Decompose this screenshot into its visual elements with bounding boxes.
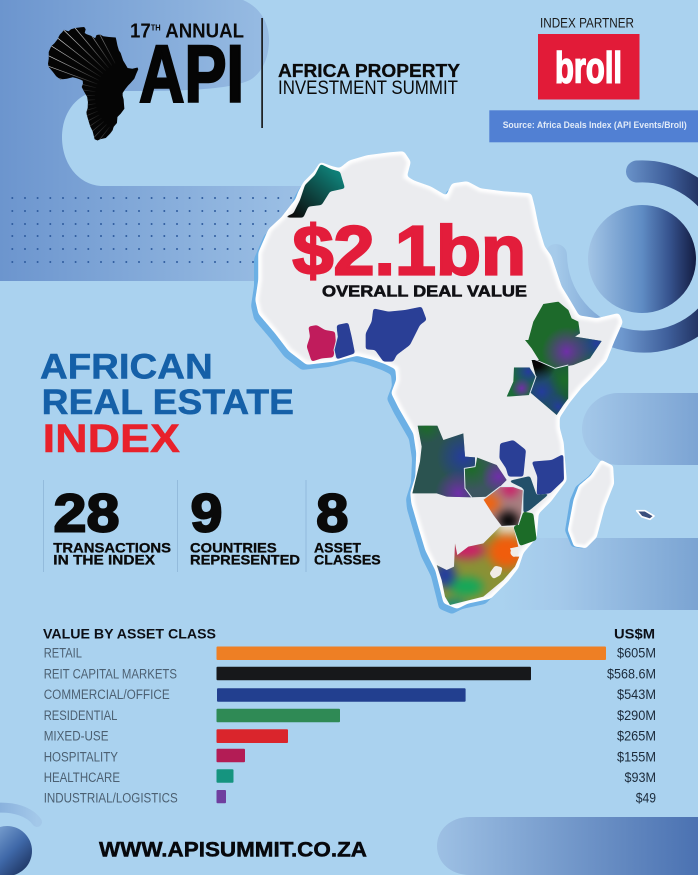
chart unit heading: US$M xyxy=(614,626,655,642)
country: Morocco xyxy=(283,164,345,218)
country: Ivory Coast xyxy=(307,325,336,362)
source bar xyxy=(489,110,700,142)
stat dividers xyxy=(43,480,306,572)
country: Tanzania highlighted region xyxy=(499,440,526,477)
row: mixed-use: MIXED-USE xyxy=(44,728,109,744)
country: Ethiopia xyxy=(525,302,602,368)
logo: API wordmark: API xyxy=(139,30,244,120)
row: healthcare: $93M xyxy=(624,770,656,785)
row: industrial/logistics: $49 xyxy=(636,790,656,806)
row: residential xyxy=(44,708,656,723)
row: commercial/office xyxy=(44,687,656,702)
source bar: Source: Africa Deals Index (API Events/Broll) xyxy=(503,120,687,131)
logo: summit name: INVESTMENT SUMMIT xyxy=(278,78,458,99)
row: mixed-use: $265M xyxy=(617,728,656,744)
logo: summit name xyxy=(278,60,461,99)
row: mixed-use xyxy=(44,728,656,744)
country: Uganda xyxy=(506,367,536,397)
chart heading: VALUE BY ASSET CLASS xyxy=(43,626,216,642)
stat: asset classes: CLASSES xyxy=(314,552,381,567)
stat: transactions xyxy=(53,484,171,567)
decorative gradient circle xyxy=(588,205,696,313)
stat: asset classes: 8 xyxy=(316,484,348,544)
decorative pill: middle right xyxy=(582,393,700,465)
country: Ghana xyxy=(334,323,355,359)
dot pattern xyxy=(11,197,292,263)
website address: WWW.APISUMMIT.CO.ZA xyxy=(99,838,367,862)
stat: transactions: IN THE INDEX xyxy=(53,552,156,567)
decorative ring arc xyxy=(556,171,700,342)
country: Mozambique north xyxy=(532,454,564,495)
row: healthcare xyxy=(44,769,656,785)
country: Zimbabwe xyxy=(484,487,523,526)
row: hospitality xyxy=(44,749,656,764)
logo: 17th annual: ANNUAL xyxy=(161,20,244,42)
row: retail xyxy=(44,646,656,660)
countries: West and East and Southern Africa xyxy=(307,300,654,613)
country border lines xyxy=(334,327,568,525)
decorative pill: lower right xyxy=(500,538,700,610)
Broll logo xyxy=(538,34,640,100)
title: AFRICAN xyxy=(40,347,213,386)
title: REAL ESTATE xyxy=(42,383,294,422)
decorative pill: bottom right xyxy=(437,817,700,875)
map shadow xyxy=(252,159,616,613)
country: South Africa xyxy=(436,526,520,605)
stat: countries: 9 xyxy=(190,484,222,544)
logo: API Africa mark xyxy=(48,27,138,140)
header background panel xyxy=(0,0,320,281)
index partner label: INDEX PARTNER xyxy=(540,14,634,30)
country: Mozambique south xyxy=(513,512,537,546)
logo rays xyxy=(48,28,115,140)
row: retail: RETAIL xyxy=(44,646,82,660)
headline figure: $2.1bn xyxy=(292,212,526,290)
row: REIT capital markets xyxy=(44,666,656,682)
row: hospitality: $155M xyxy=(617,750,656,764)
row: retail: $605M xyxy=(617,646,656,660)
row: healthcare: HEALTHCARE xyxy=(44,770,120,785)
row: industrial/logistics xyxy=(44,790,656,806)
row: residential: $290M xyxy=(617,708,656,723)
stat: countries xyxy=(190,484,300,567)
country: Angola xyxy=(412,426,475,498)
row: commercial/office: $543M xyxy=(617,687,656,702)
headline caption: OVERALL DEAL VALUE xyxy=(322,284,527,301)
stat: countries: COUNTRIES xyxy=(190,540,277,555)
row: REIT capital markets: REIT CAPITAL MARKETS xyxy=(44,666,177,682)
logo divider xyxy=(261,18,263,128)
row: REIT capital markets: $568.6M xyxy=(607,666,656,682)
Eswatini xyxy=(510,547,519,557)
decorative arc: bottom left xyxy=(0,808,37,822)
country: Malawi region xyxy=(508,476,550,513)
row: industrial/logistics: INDUSTRIAL/LOGISTICS xyxy=(44,790,178,806)
title: INDEX xyxy=(43,417,180,461)
country: Zambia xyxy=(464,458,506,498)
right edge strip xyxy=(698,0,700,875)
logo: 17th annual: TH xyxy=(151,23,161,32)
stat: asset classes: ASSET xyxy=(314,540,362,555)
title xyxy=(40,347,294,461)
Lesotho xyxy=(489,566,503,579)
island: Mauritius xyxy=(637,511,654,519)
map landmass xyxy=(257,153,621,607)
Madagascar xyxy=(565,462,613,549)
row: hospitality: HOSPITALITY xyxy=(44,750,118,764)
country: Kenya xyxy=(530,360,568,415)
stat: transactions: TRANSACTIONS xyxy=(53,540,171,555)
Broll logo: broll xyxy=(555,44,622,92)
stat: countries: REPRESENTED xyxy=(190,552,300,567)
row: commercial/office: COMMERCIAL/OFFICE xyxy=(44,687,170,702)
decorative circle: bottom left xyxy=(0,826,32,875)
logo: summit name: AFRICA PROPERTY xyxy=(278,60,461,81)
country: Nigeria xyxy=(366,307,427,362)
map of Africa xyxy=(252,153,654,613)
logo: 17th annual: 17 xyxy=(130,20,152,42)
stat: transactions: 28 xyxy=(54,484,120,544)
bar chart: value by asset class xyxy=(43,626,656,806)
row: residential: RESIDENTIAL xyxy=(44,708,118,723)
stat: asset classes xyxy=(314,484,381,567)
